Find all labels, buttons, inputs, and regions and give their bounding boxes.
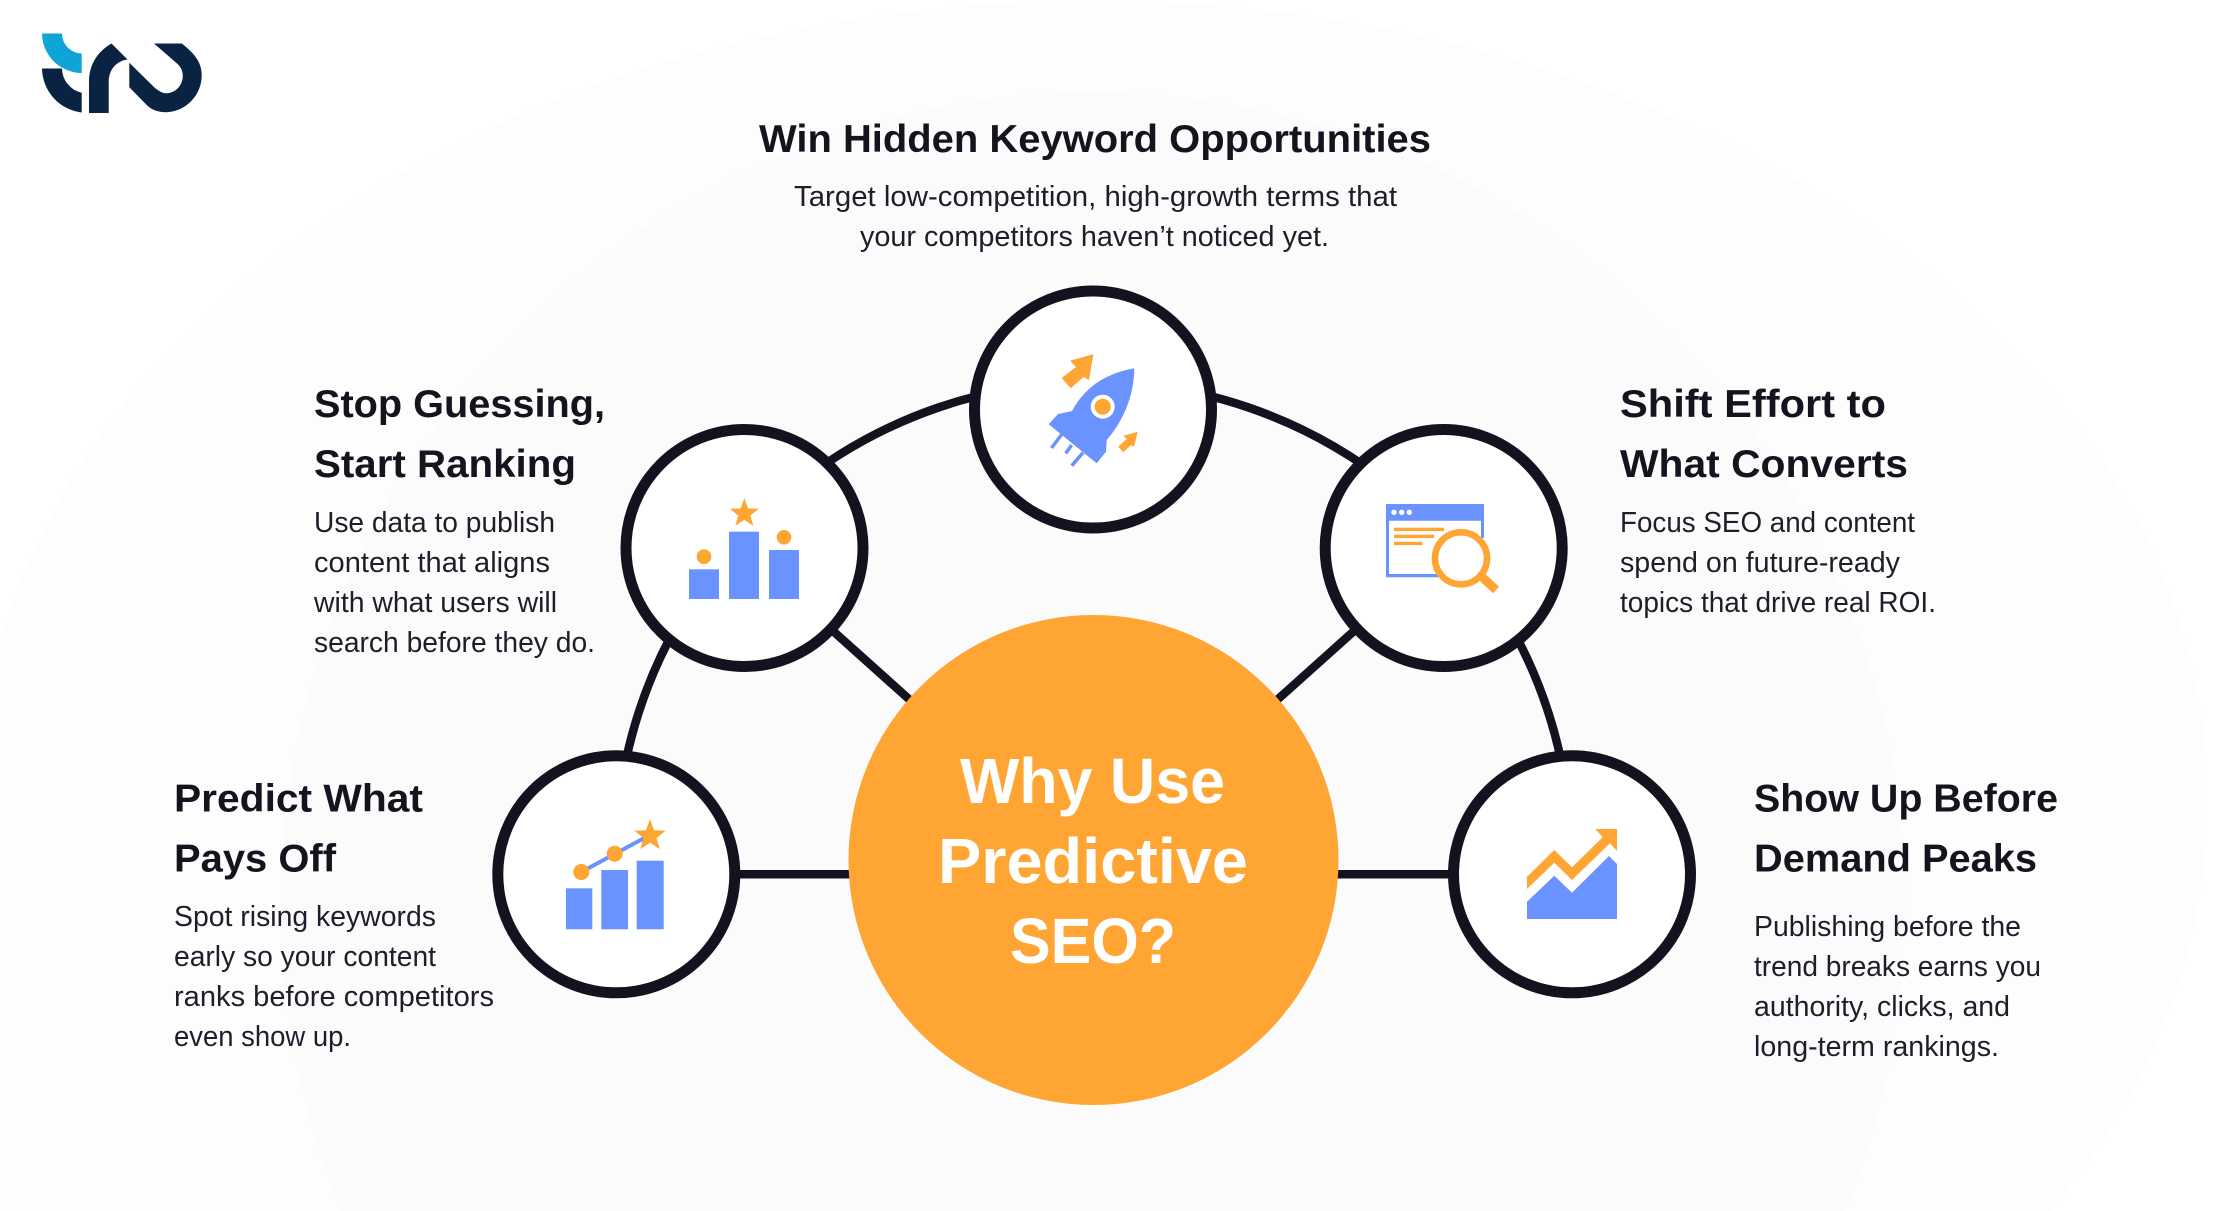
heading: Win Hidden Keyword Opportunities: [759, 118, 1431, 161]
description: long-term rankings.: [1754, 1031, 1999, 1063]
description: trend breaks earns you: [1754, 951, 2041, 983]
heading: Predict What: [174, 778, 423, 820]
center title: [938, 745, 1248, 977]
description: topics that drive real ROI.: [1620, 587, 1936, 619]
connector spoke: lower right to center: [1328, 870, 1455, 879]
description: [313, 507, 595, 659]
description: [1620, 507, 1936, 619]
connector arc: [626, 382, 1561, 760]
center title: Predictive: [938, 825, 1248, 897]
heading: Pays Off: [174, 838, 337, 880]
text block: Predict What Pays Off: [174, 778, 494, 1053]
heading: Demand Peaks: [1754, 838, 2037, 880]
heading: [174, 778, 423, 880]
description: early so your content: [174, 941, 436, 973]
description: [174, 901, 494, 1053]
text block: Shift Effort to What Converts: [1620, 383, 1936, 619]
description: search before they do.: [314, 627, 595, 659]
icon: podium bars: [689, 498, 799, 599]
node: bars with star: [626, 430, 863, 666]
node: growth bars: [498, 756, 735, 993]
connector spoke: lower left to center: [735, 870, 860, 879]
description: Target low-competition, high-growth terms that: [794, 181, 1397, 213]
heading: [1620, 383, 1908, 486]
description: content that aligns: [314, 547, 550, 579]
node: rocket: [974, 291, 1212, 528]
logo: [42, 34, 202, 113]
node: browser search: [1325, 430, 1562, 666]
heading: Shift Effort to: [1620, 383, 1886, 426]
description: Use data to publish: [314, 507, 555, 539]
text block: Win Hidden Keyword Opportunities: [759, 118, 1431, 253]
connector spoke: upper right to center: [1257, 631, 1354, 718]
heading: What Converts: [1620, 443, 1908, 486]
node: area chart: [1454, 756, 1690, 993]
description: even show up.: [174, 1021, 351, 1053]
heading: [1754, 778, 2058, 880]
connector spoke: upper left to center: [833, 631, 930, 718]
heading: Stop Guessing,: [314, 383, 605, 426]
description: [1754, 911, 2041, 1063]
description: Focus SEO and content: [1620, 507, 1915, 539]
center title: SEO?: [1010, 905, 1176, 977]
text block: Show Up Before Demand Peaks: [1754, 778, 2058, 1063]
text block: Stop Guessing, Start Ranking: [313, 383, 605, 659]
heading: Show Up Before: [1754, 778, 2058, 820]
description: ranks before competitors: [174, 981, 494, 1013]
icon: browser window with magnifier: [1386, 504, 1496, 590]
heading: Start Ranking: [314, 443, 576, 486]
description: Spot rising keywords: [174, 901, 436, 933]
icon: bars with trend line and star: [566, 819, 666, 929]
center title: Why Use: [960, 745, 1225, 817]
icon: rocket: [1049, 354, 1138, 466]
description: spend on future-ready: [1620, 547, 1900, 579]
description: with what users will: [313, 587, 557, 619]
description: Publishing before the: [1754, 911, 2021, 943]
heading: [314, 383, 605, 486]
icon: rising area chart with arrow: [1527, 829, 1617, 919]
description: [794, 181, 1397, 253]
description: authority, clicks, and: [1754, 991, 2010, 1023]
center circle: [848, 615, 1338, 1105]
description: your competitors haven’t noticed yet.: [860, 221, 1329, 253]
